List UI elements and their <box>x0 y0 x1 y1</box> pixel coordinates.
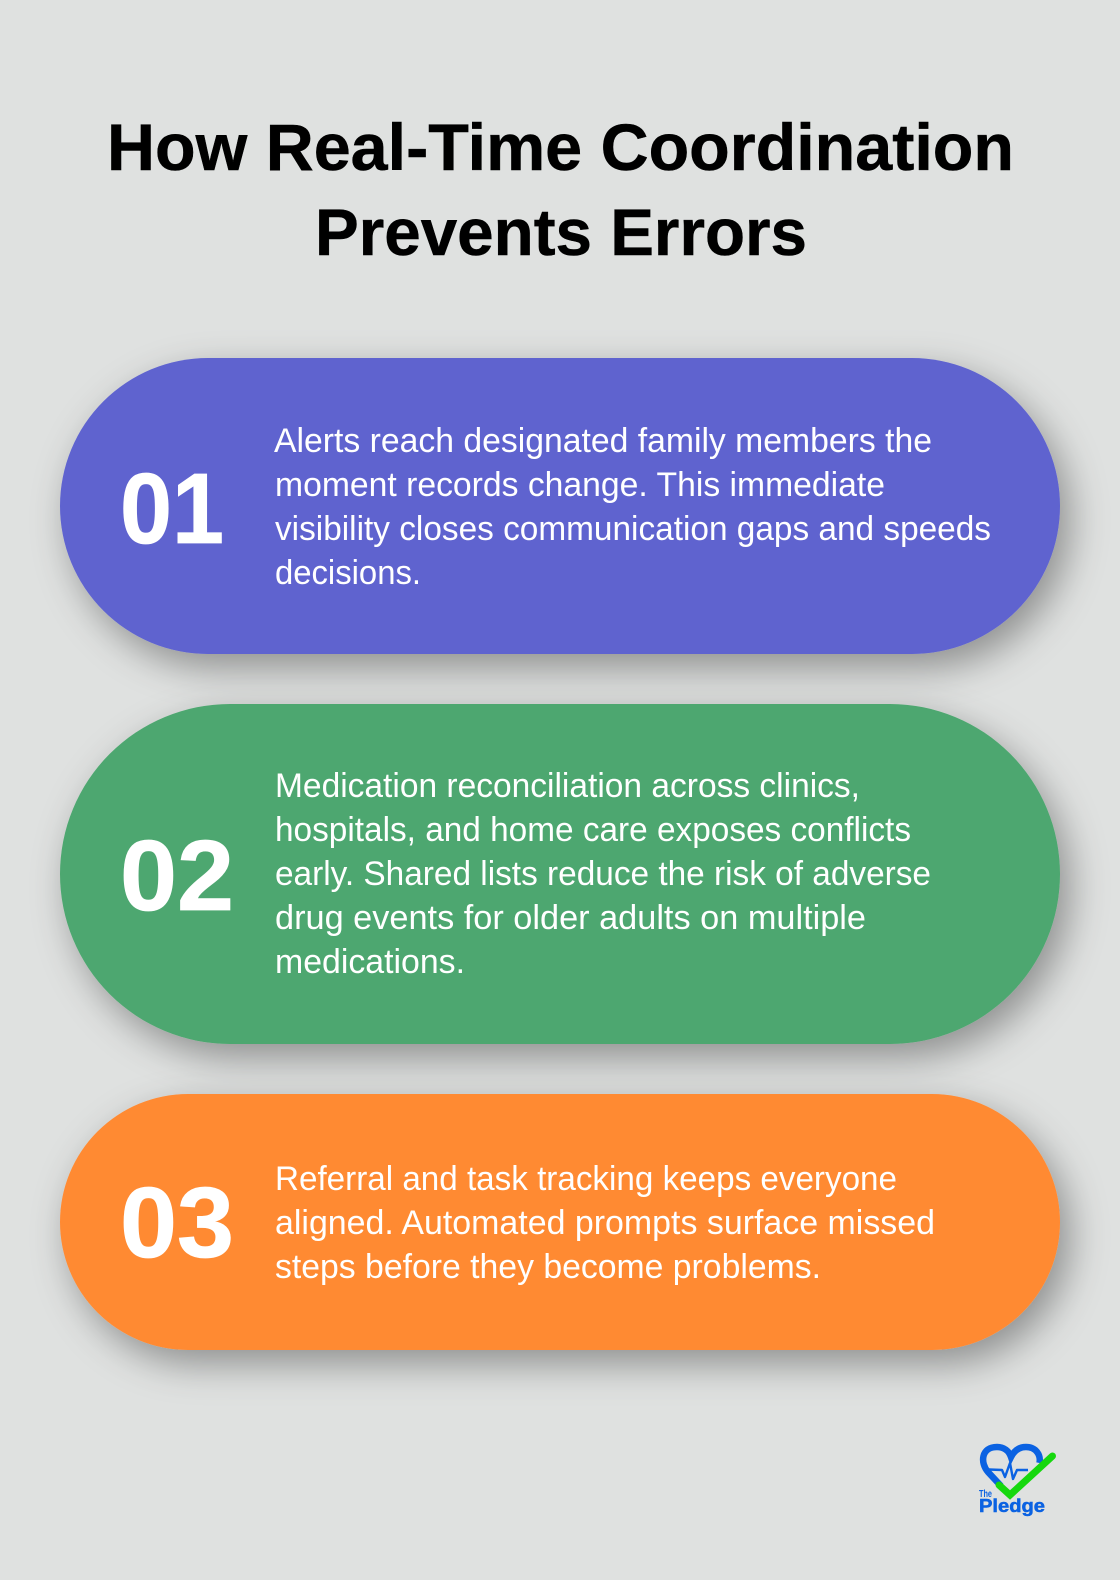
title: Prevents Errors <box>315 195 807 269</box>
icon: heartbeat line <box>989 1463 1028 1479</box>
pill background 01 <box>60 358 1060 654</box>
number 01: 01 <box>120 453 224 565</box>
logo text: The: The <box>979 1488 992 1500</box>
icon: check mark <box>999 1456 1052 1495</box>
text block 01: Alerts reach designated family members the <box>274 422 932 460</box>
number 02: 02 <box>120 820 234 932</box>
text block 03: Referral and task tracking keeps everyone <box>275 1160 897 1198</box>
pill background 02 <box>60 704 1060 1044</box>
logo: The Pledge <box>979 1447 1052 1516</box>
text block 02: medications. <box>275 943 465 981</box>
text block 02: early. Shared lists reduce the risk of adverse <box>275 855 931 893</box>
title: How Real-Time Coordination <box>107 110 1014 184</box>
icon: heart <box>983 1447 1040 1486</box>
text block 01: decisions. <box>275 554 421 592</box>
text block 02: hospitals, and home care exposes conflicts <box>275 811 911 849</box>
number 03: 03 <box>120 1167 234 1279</box>
text block 01: moment records change. This immediate <box>275 466 885 504</box>
text block 03 <box>275 1160 935 1286</box>
logo text: Pledge: Pledge <box>979 1496 1045 1516</box>
text block 02 <box>275 767 931 981</box>
text block 03: aligned. Automated prompts surface missed <box>275 1204 935 1242</box>
pill background 03 <box>60 1094 1060 1350</box>
panel: step 01 <box>60 358 1060 654</box>
text block 01 <box>274 422 991 592</box>
panel: step 02 <box>60 704 1060 1044</box>
text block 02: Medication reconciliation across clinics, <box>275 767 860 805</box>
title <box>107 110 1014 269</box>
panel: step 03 <box>60 1094 1060 1350</box>
text block 01: visibility closes communication gaps and speeds <box>275 510 991 548</box>
text block 03: steps before they become problems. <box>275 1248 821 1286</box>
text block 02: drug events for older adults on multiple <box>275 899 866 937</box>
